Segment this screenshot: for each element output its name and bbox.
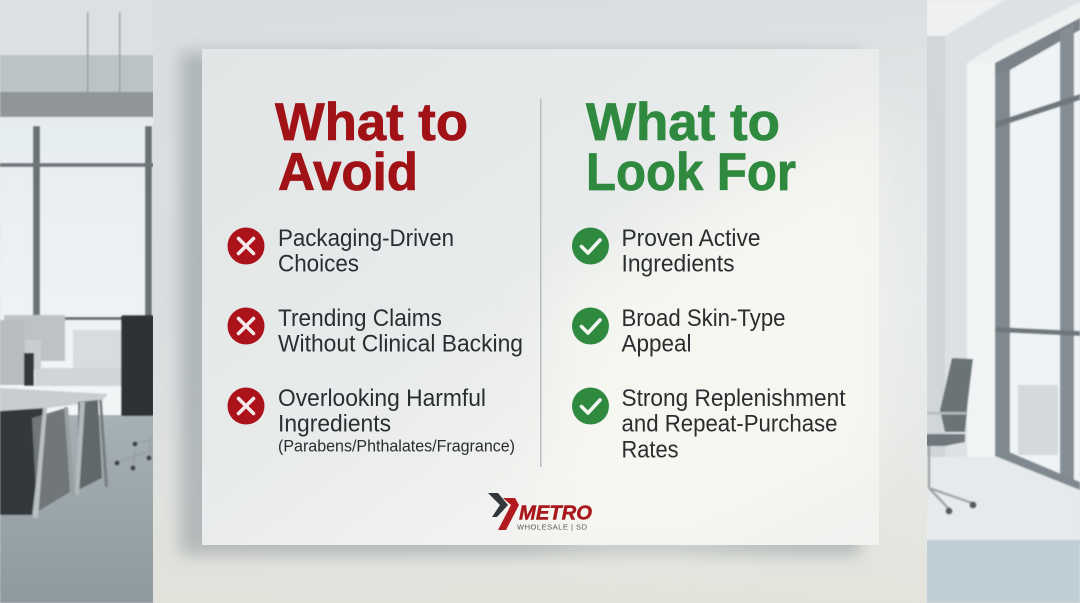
label: Appeal xyxy=(622,330,692,358)
label: Overlooking Harmful xyxy=(278,385,486,412)
item: packaging-driven choices xyxy=(228,225,454,278)
icon: chevrons xyxy=(488,493,519,530)
label: (Parabens/Phthalates/Fragrance) xyxy=(278,438,515,456)
wordmark: METRO xyxy=(519,502,592,524)
item: harmful ingredients xyxy=(228,385,515,456)
label xyxy=(622,225,760,278)
icon: red x xyxy=(228,388,264,424)
item: strong replenishment xyxy=(572,385,846,464)
background: office right side xyxy=(926,0,1080,603)
item: proven active ingredients xyxy=(572,225,760,278)
label xyxy=(278,305,523,358)
heading: what to avoid: Avoid xyxy=(278,143,418,202)
panel: board xyxy=(202,49,879,545)
icon: red x xyxy=(228,308,264,344)
icon: green check xyxy=(572,228,609,264)
background: wall xyxy=(153,0,927,603)
heading: what to look for xyxy=(586,93,796,202)
heading: what to avoid xyxy=(275,93,468,202)
item: broad skin-type appeal xyxy=(572,305,786,358)
board shadow xyxy=(180,52,860,555)
label: Without Clinical Backing xyxy=(278,330,523,358)
icon: green check xyxy=(572,388,609,424)
label: Broad Skin-Type xyxy=(622,305,786,332)
icon: green check xyxy=(572,308,609,344)
label: Trending Claims xyxy=(278,305,442,332)
column: what to avoid xyxy=(228,93,523,456)
label: Strong Replenishment xyxy=(622,385,846,412)
label: Proven Active xyxy=(622,225,760,252)
background: office left side xyxy=(0,0,154,603)
label xyxy=(622,385,846,464)
tagline: WHOLESALE | SD xyxy=(517,522,588,532)
column: what to look for xyxy=(572,93,846,464)
label: Rates xyxy=(622,436,678,464)
light streak xyxy=(560,110,879,545)
label: and Repeat-Purchase xyxy=(622,410,838,438)
label: Ingredients xyxy=(622,250,734,278)
label xyxy=(278,385,515,456)
label: Ingredients xyxy=(278,410,391,438)
heading: what to look for: Look For xyxy=(586,143,796,202)
heading: what to avoid: What to xyxy=(275,93,468,152)
label xyxy=(622,305,786,358)
label: Packaging-Driven xyxy=(278,225,454,252)
label xyxy=(278,225,454,278)
divider xyxy=(540,99,542,467)
label: Choices xyxy=(278,250,359,278)
icon: red x xyxy=(228,228,264,264)
item: trending claims xyxy=(228,305,523,358)
heading: what to look for: What to xyxy=(586,93,780,152)
logo: metro wholesale xyxy=(488,493,592,532)
